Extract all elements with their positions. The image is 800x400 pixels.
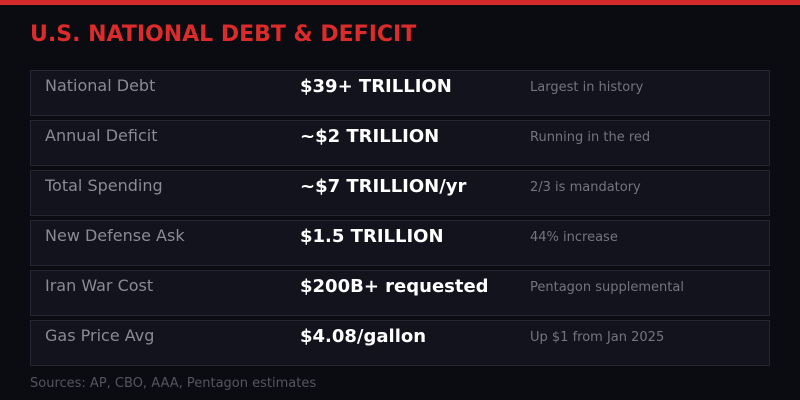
row: defense ask: New Defense Ask [45, 226, 185, 245]
row: iran war cost: $200B+ requested [300, 276, 489, 297]
row: national debt: $39+ TRILLION [300, 76, 452, 97]
row: gas price: Gas Price Avg [45, 326, 154, 345]
row: annual deficit [30, 120, 770, 166]
row: defense ask: 44% increase [530, 230, 618, 245]
row: annual deficit: ~$2 TRILLION [300, 126, 439, 147]
row: defense ask: $1.5 TRILLION [300, 226, 444, 247]
row: total spending: Total Spending [45, 176, 163, 195]
row: iran war cost [30, 270, 770, 316]
row: gas price: Up $1 from Jan 2025 [530, 330, 664, 345]
row: total spending [30, 170, 770, 216]
row: total spending: 2/3 is mandatory [530, 180, 641, 195]
row: national debt: National Debt [45, 76, 155, 95]
row: gas price: $4.08/gallon [300, 326, 426, 347]
row: annual deficit: Annual Deficit [45, 126, 157, 145]
row: iran war cost: Iran War Cost [45, 276, 153, 295]
row: national debt [30, 70, 770, 116]
row: iran war cost: Pentagon supplemental [530, 280, 684, 295]
title: U.S. NATIONAL DEBT & DEFICIT [30, 22, 416, 47]
row: gas price [30, 320, 770, 366]
row: defense ask [30, 220, 770, 266]
sources: Sources: AP, CBO, AAA, Pentagon estimates [30, 376, 316, 391]
row: total spending: ~$7 TRILLION/yr [300, 176, 466, 197]
row: annual deficit: Running in the red [530, 130, 650, 145]
row: national debt: Largest in history [530, 80, 643, 95]
